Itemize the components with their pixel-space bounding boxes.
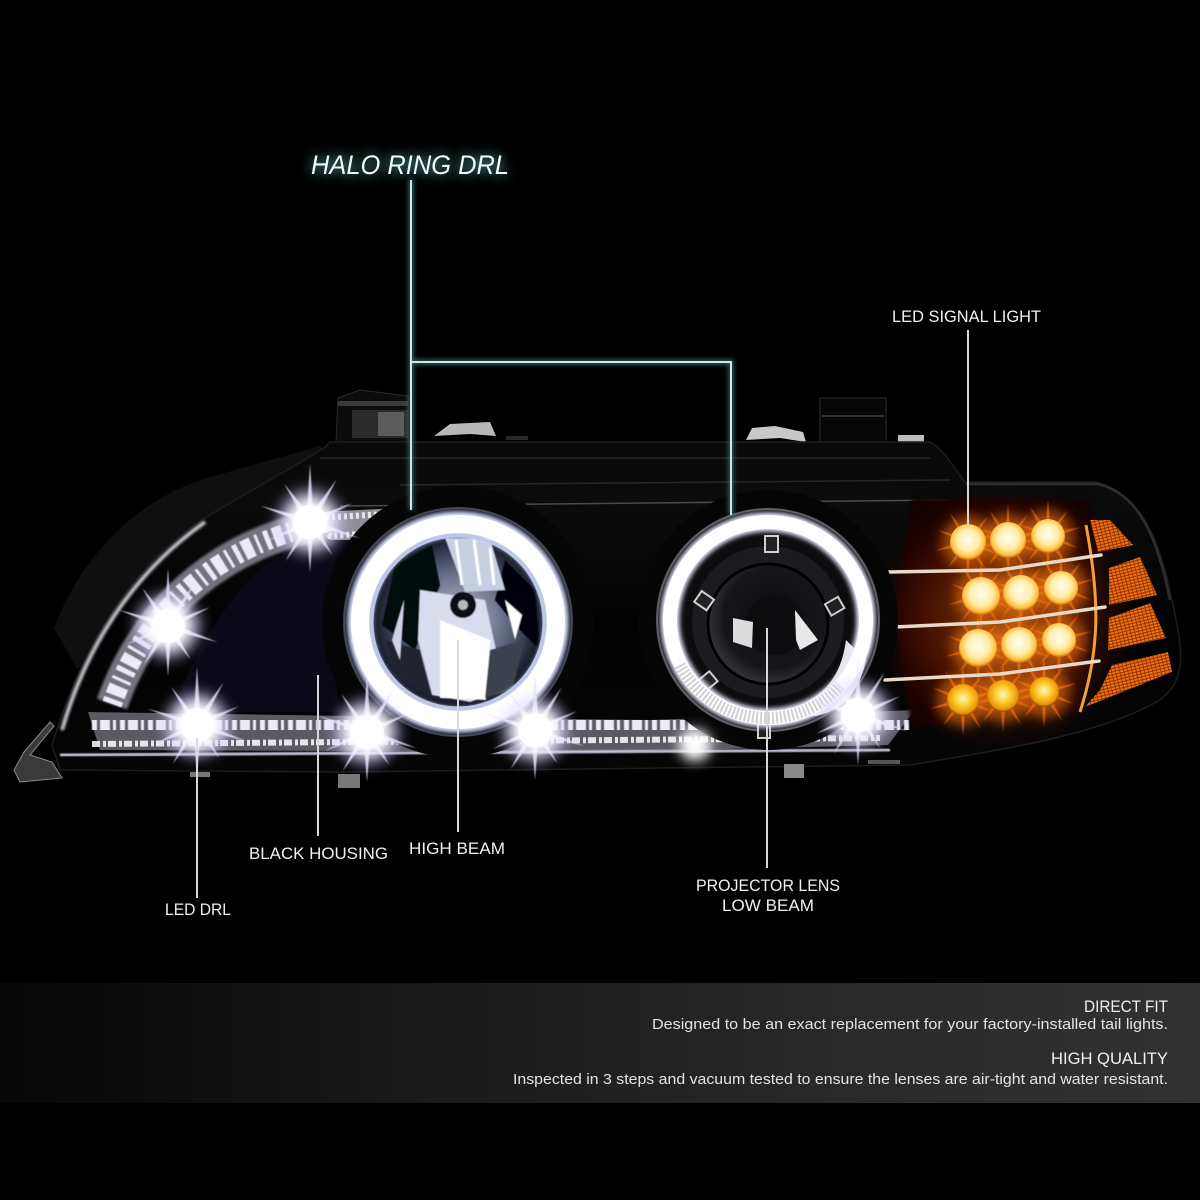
lower housing fittings [14,722,900,788]
label: projector lens low beam: PROJECTOR LENS [696,876,840,895]
label: LED signal light: LED SIGNAL LIGHT [892,307,1041,326]
title glow: HALO RING DRL [311,150,509,180]
LED bulbs [947,519,1078,716]
label: black housing: BLACK HOUSING [249,844,388,863]
label: projector lens low beam [696,876,840,915]
halo ring and high beam reflector [344,508,572,736]
feature: direct fit [652,997,1168,1033]
label: high beam: HIGH BEAM [409,839,505,858]
high beam leader [457,640,459,832]
panel: features band [0,983,1200,1103]
reflector facets [382,538,540,702]
halo ring and projector lens [657,509,879,738]
halo ring DRL bracket [411,180,731,515]
feature: high quality [513,1049,1168,1088]
label: LED DRL: LED DRL [165,900,231,919]
dark purple side panel [172,540,345,712]
black housing leader [317,675,319,836]
title: halo ring DRL: HALO RING DRL [311,150,509,180]
mounting tab right [820,398,886,442]
mounting tab left [336,390,408,442]
LED DRL star flares [117,464,909,782]
outer fin on left of housing [54,446,345,670]
feature: direct fit: DIRECT FIT [1084,997,1168,1016]
main housing body [52,442,1181,772]
feature: high quality: Inspected in 3 steps and vacuum tested to ensure the lenses are air-tight and water resistant. [513,1071,1168,1088]
chrome clips on top [434,422,924,443]
LED DRL leader [196,738,198,898]
side chrome arc of LED DRL [62,508,398,730]
LED signal light leader [967,330,969,526]
projector shroud clips [694,536,844,738]
amber LED turn signal panel [870,483,1172,753]
black bezels [322,486,594,758]
lower LED DRL strip [60,710,915,755]
housing ridge lines [320,458,1170,600]
amber side reflector [1085,520,1172,707]
chrome LED divider bars [885,555,1105,680]
projector lens leader [766,628,768,868]
feature: direct fit: Designed to be an exact replacement for your factory-installed tail lights. [652,1016,1168,1033]
label: projector lens low beam: LOW BEAM [722,896,814,915]
halo ring DRL bracket glow [411,180,731,515]
lens reflections [733,618,753,648]
callout lines [197,180,968,898]
LED rays [929,500,1095,736]
headlight product [14,390,1181,788]
feature: high quality: HIGH QUALITY [1051,1049,1168,1068]
